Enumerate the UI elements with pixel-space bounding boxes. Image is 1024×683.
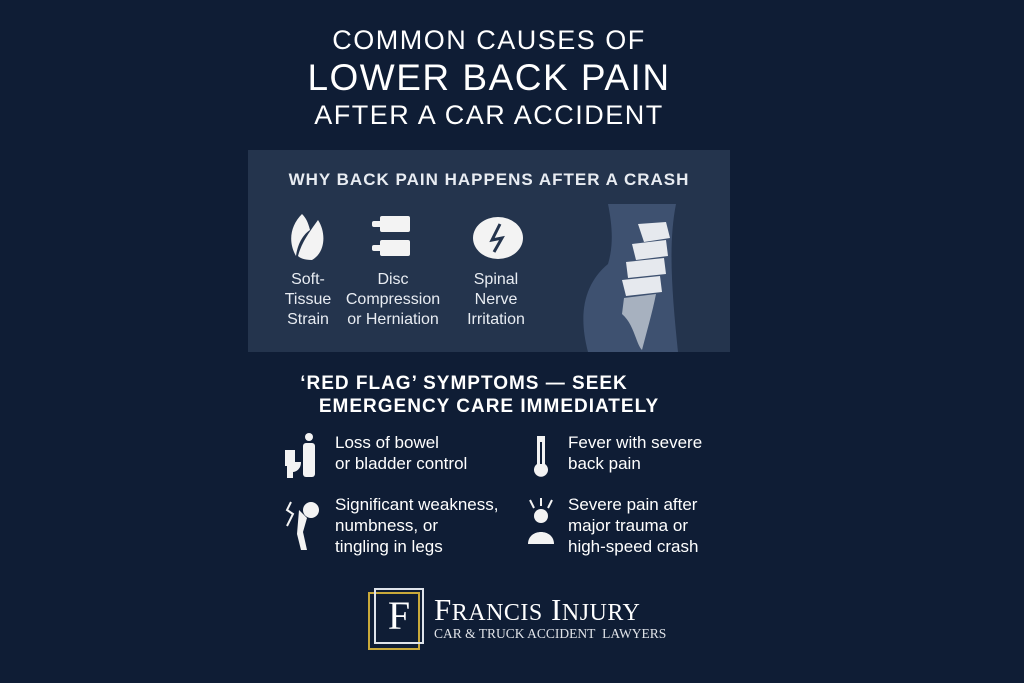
item: bowel: Loss of bowel (335, 433, 439, 452)
icon: discs (372, 216, 410, 256)
panel: why back pain happens (248, 150, 730, 352)
item: fever (534, 433, 702, 477)
icon: person with pain (528, 498, 554, 544)
item: bowel (285, 433, 467, 478)
label: soft tissue (285, 271, 331, 328)
item: trauma (528, 495, 698, 556)
red flag heading: EMERGENCY CARE IMMEDIATELY (319, 396, 659, 417)
title (307, 25, 671, 130)
label: disc: Disc (377, 271, 409, 288)
item: bowel: or bladder control (335, 454, 467, 473)
illustration: spine (583, 204, 678, 352)
title: COMMON CAUSES OF (332, 25, 646, 55)
icon: thermometer (534, 436, 548, 477)
logo (368, 588, 666, 650)
item: trauma: major trauma or (568, 516, 688, 535)
label: nerve: Nerve (475, 291, 517, 308)
label: soft tissue: Tissue (285, 291, 331, 308)
item: fever: back pain (568, 454, 641, 473)
item: trauma: high-speed crash (568, 537, 698, 556)
label: disc: Compression (346, 291, 440, 308)
item: weakness: numbness, or (335, 516, 438, 535)
label: nerve (467, 271, 525, 328)
title: AFTER A CAR ACCIDENT (314, 100, 664, 130)
label: soft tissue: Soft- (291, 271, 325, 288)
icon: bent person (286, 502, 319, 550)
label: nerve: Spinal (474, 271, 518, 288)
red flag heading (300, 373, 659, 417)
panel heading: WHY BACK PAIN HAPPENS AFTER A CRASH (289, 170, 689, 189)
icon: toilet person (285, 433, 315, 478)
label: nerve: Irritation (467, 311, 525, 328)
red flag heading: ‘RED FLAG’ SYMPTOMS — SEEK (300, 373, 628, 394)
label: disc: or Herniation (347, 311, 439, 328)
label: disc (346, 271, 440, 328)
logo: CAR & TRUCK ACCIDENT LAWYERS (434, 626, 666, 641)
icon: leaves (291, 214, 324, 260)
logo: F (388, 593, 410, 638)
item: weakness: Significant weakness, (335, 495, 498, 514)
item: fever: Fever with severe (568, 433, 702, 452)
logo text: FRANCIS INJURY (434, 592, 640, 627)
logo mark (368, 592, 420, 650)
item: weakness (286, 495, 498, 556)
item: weakness: tingling in legs (335, 537, 443, 556)
title: LOWER BACK PAIN (307, 57, 671, 98)
label: soft tissue: Strain (287, 311, 329, 328)
icon: nerve bolt (473, 217, 523, 259)
item: trauma: Severe pain after (568, 495, 697, 514)
